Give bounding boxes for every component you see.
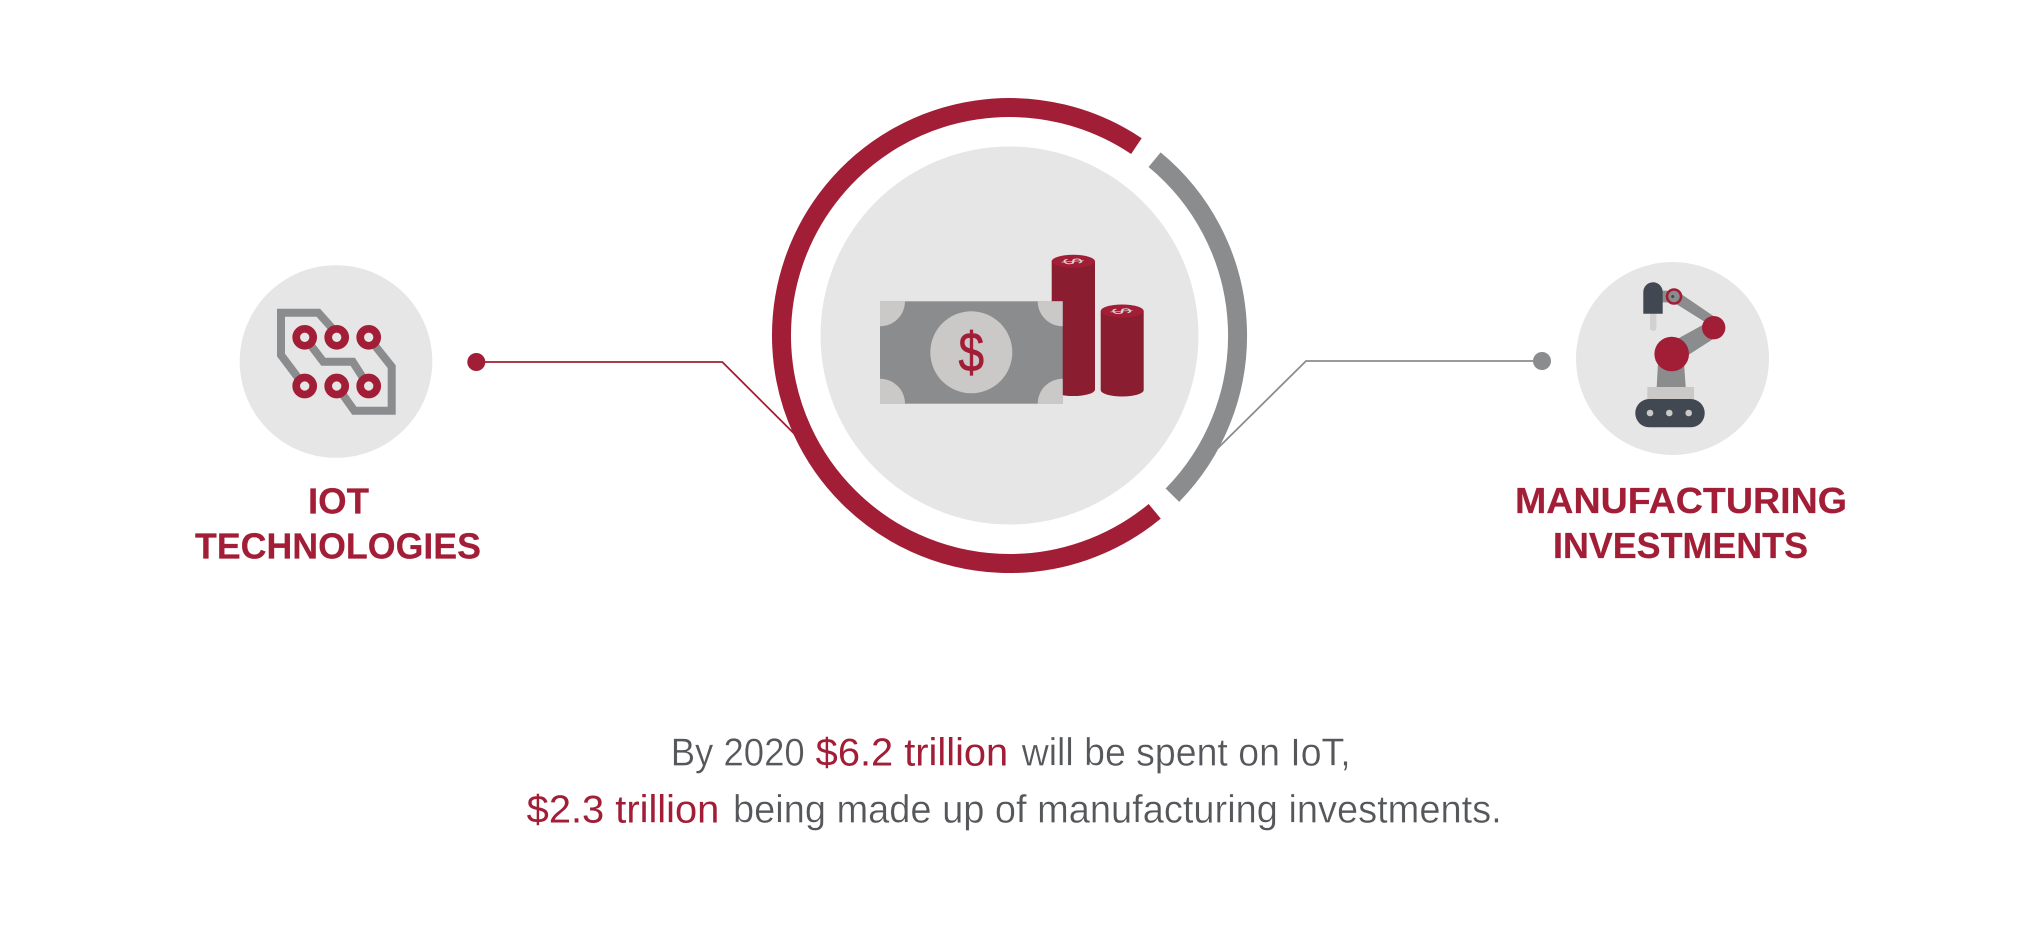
caption line 2: $2.3 trillion [527, 789, 719, 832]
ring: red segment [781, 108, 1155, 564]
icon background disc [1576, 262, 1769, 455]
icon: short coin stack: $ [1104, 307, 1138, 315]
heading: IoT technologies [195, 480, 481, 566]
panel: IoT technologies [195, 265, 481, 566]
heading: IoT technologies: TECHNOLOGIES [195, 525, 481, 566]
caption line 1: $6.2 trillion [816, 732, 1008, 775]
heading: manufacturing investments: MANUFACTURING [1515, 480, 1847, 521]
icon background disc [240, 265, 432, 458]
icon: short coin stack [1101, 304, 1144, 397]
heading: manufacturing investments: INVESTMENTS [1553, 525, 1808, 566]
icon: robot arm [1635, 282, 1725, 427]
caption line 1: will be spent on IoT, [1021, 732, 1351, 775]
heading: IoT technologies: IOT [308, 480, 369, 522]
centre disc [820, 146, 1198, 524]
icon: banknote [880, 301, 1063, 404]
caption line 2: being made up of manufacturing investments. [733, 789, 1502, 832]
heading: manufacturing investments [1515, 480, 1847, 566]
icon: banknote: $ [959, 321, 984, 384]
text block: caption [527, 732, 1502, 832]
caption line 1 [671, 732, 1351, 775]
caption line 1: By 2020 [671, 732, 805, 775]
icon: tall coin stack [1052, 255, 1095, 396]
panel: central money graphic [781, 108, 1238, 564]
connector: IoT to centre [467, 353, 796, 436]
icon: tall coin stack: $ [1055, 258, 1089, 265]
icon: circuit board [281, 313, 392, 411]
panel: manufacturing investments [1515, 262, 1847, 566]
connector: manufacturing to centre [1216, 352, 1551, 450]
ring: grey segment [1155, 160, 1238, 495]
